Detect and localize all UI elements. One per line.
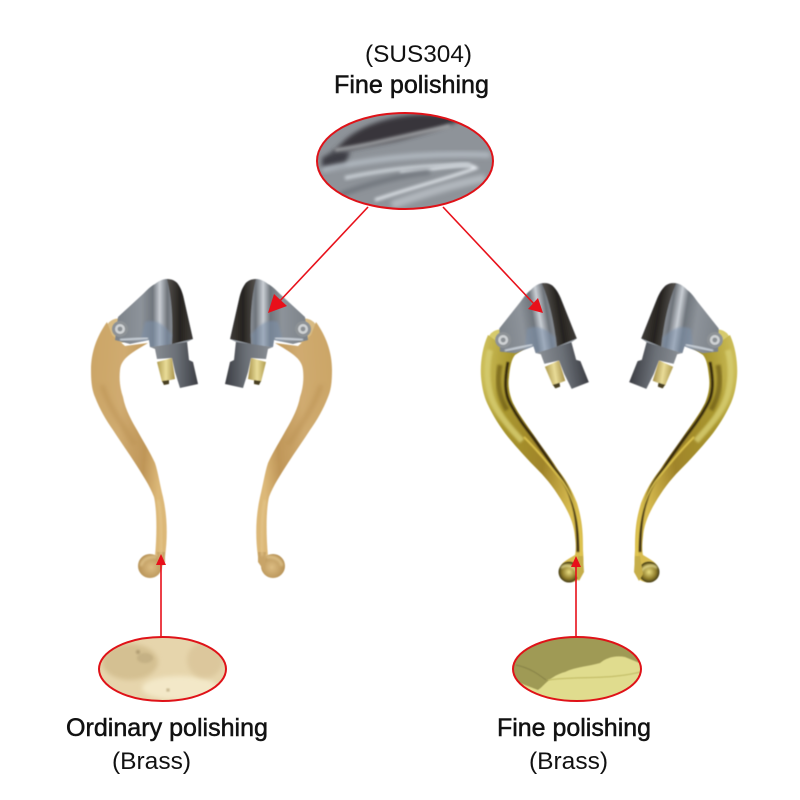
heading: top fine polishing: Fine polishing [334, 71, 489, 99]
right lever pair: fine polished brass [481, 278, 737, 582]
lever: fine polish mirrored right [629, 278, 737, 582]
arrow: steel callout to left pair head [268, 207, 368, 313]
lever: fine polish left [481, 278, 589, 582]
callout: stainless steel fine polish detail [315, 110, 495, 212]
text: SUS304 material label: (SUS304) [365, 41, 472, 68]
text: brass label right: (Brass) [529, 748, 608, 775]
heading: fine polishing brass: Fine polishing [497, 714, 651, 742]
callout: fine polished brass detail [512, 636, 642, 702]
callout: ordinary polished brass detail [98, 636, 228, 702]
lever: ordinary polish mirrored right [225, 279, 332, 578]
text: brass label left: (Brass) [112, 748, 191, 775]
arrow: ordinary polish callout to ball end [156, 554, 166, 637]
left lever pair: ordinary polished brass [91, 279, 332, 578]
heading: ordinary polishing: Ordinary polishing [66, 714, 268, 742]
lever: ordinary polish left [91, 279, 198, 578]
arrow: fine polish callout to ball end [571, 556, 581, 637]
arrow: steel callout to right pair head [443, 207, 543, 313]
